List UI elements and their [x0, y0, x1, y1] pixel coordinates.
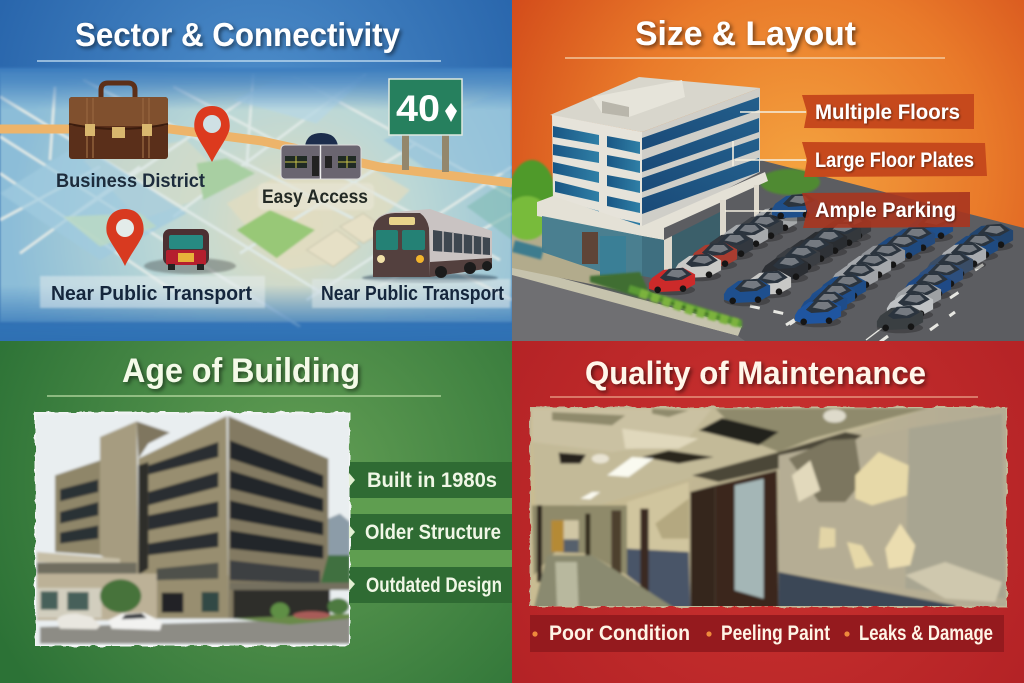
icon: highway sign 40: 40	[396, 88, 440, 129]
label: Built in 1980s: Built in 1980s	[367, 469, 497, 492]
callout: Large Floor Plates: Large Floor Plates	[815, 149, 974, 172]
label: Easy Access: Easy Access	[262, 187, 368, 208]
left facade	[552, 115, 642, 232]
label strips	[349, 462, 512, 603]
arrow markers	[349, 473, 355, 591]
panel: Quality of Maintenance	[512, 341, 1024, 683]
label: Business District: Business District	[56, 171, 206, 192]
icon: map pin upper	[194, 106, 230, 162]
podium	[537, 172, 768, 280]
title: Age of Building: Age of Building	[122, 352, 360, 390]
label strip: Near Public Transport left: Near Public Transport	[51, 283, 252, 305]
icon: large bus	[362, 209, 498, 283]
callout: Multiple Floors	[740, 94, 974, 129]
title: Size & Layout: Size & Layout	[635, 15, 856, 53]
label: Older Structure: Older Structure	[365, 521, 501, 544]
icon: highway sign 40	[389, 79, 462, 172]
city map	[0, 68, 517, 345]
grass and hedge	[512, 240, 742, 328]
bullet: Peeling Paint: Peeling Paint	[721, 622, 830, 645]
label strip: Near Public Transport right: Near Public Transport	[321, 283, 504, 305]
bullet: Poor Condition: Poor Condition	[549, 622, 690, 645]
divider line	[37, 60, 441, 62]
callout: Large Floor Plates	[733, 141, 987, 177]
label strip: Near Public Transport left	[40, 276, 265, 308]
label: Outdated Design	[349, 567, 512, 603]
panel: Size & Layout	[505, 0, 1024, 342]
title: Quality of Maintenance: Quality of Maintenance	[585, 355, 926, 391]
title: Sector & Connectivity: Sector & Connectivity	[75, 16, 401, 53]
icon: briefcase	[69, 83, 168, 159]
office building	[512, 77, 768, 328]
label strip: Near Public Transport right	[312, 279, 510, 308]
divider line	[550, 396, 978, 398]
callout: Ample Parking: Ample Parking	[815, 199, 956, 222]
icon: map pin lower	[106, 209, 144, 266]
label: Older Structure	[349, 514, 512, 550]
label: Outdated Design: Outdated Design	[366, 574, 502, 597]
label: Built in 1980s	[349, 462, 512, 498]
photo: aged concrete office building	[35, 412, 350, 647]
parking bay markings	[750, 263, 984, 341]
divider line	[47, 395, 441, 397]
parked cars	[649, 194, 1013, 333]
icon: small bus	[144, 229, 236, 274]
callout: Multiple Floors: Multiple Floors	[815, 101, 960, 124]
highway	[0, 129, 512, 183]
icon: station building	[281, 133, 361, 179]
bullet: Leaks & Damage: Leaks & Damage	[859, 622, 993, 645]
callout: Ample Parking	[725, 192, 970, 228]
building roof	[550, 77, 760, 132]
panel: Sector & Connectivity	[0, 0, 517, 345]
panel: Age of Building	[0, 341, 512, 683]
right facade	[642, 88, 760, 232]
divider line	[565, 57, 945, 59]
bottom label bar	[530, 615, 1004, 652]
photo: deteriorated corridor	[530, 407, 1007, 609]
parking lot ground	[512, 160, 1024, 341]
trees behind building	[505, 160, 820, 240]
